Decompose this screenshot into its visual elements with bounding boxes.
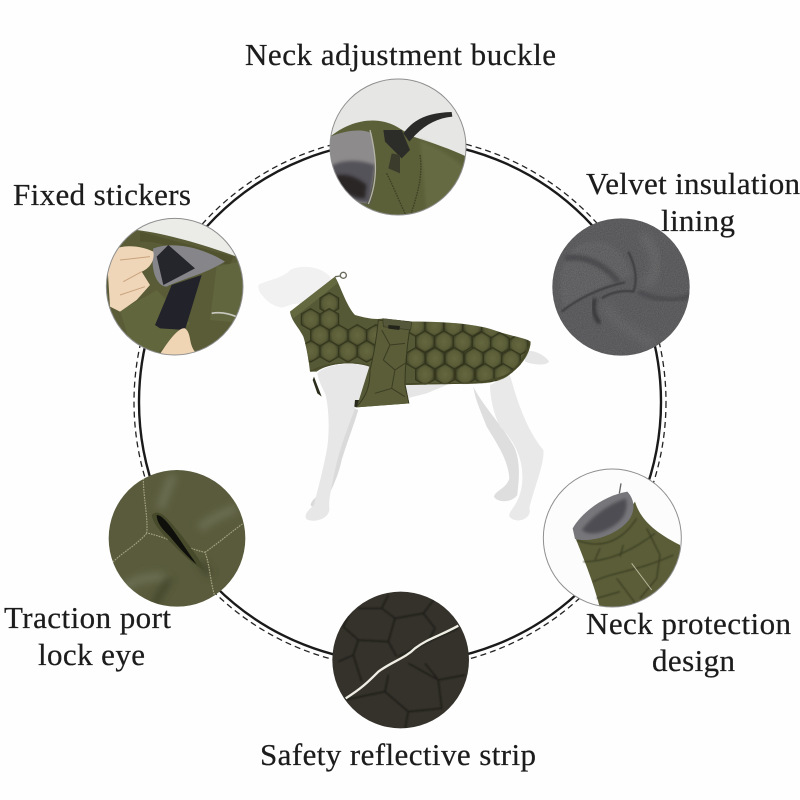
photo: safety reflective strip <box>332 592 469 728</box>
quilted coat <box>287 273 533 410</box>
heading: Neck protection design <box>586 606 792 678</box>
heading: Velvet insulation lining: lining <box>661 203 735 238</box>
dog in coat illustration <box>258 267 549 521</box>
coat strap <box>355 320 411 408</box>
heading: Neck adjustment buckle: Neck adjustment buckle <box>245 37 556 72</box>
heading: Fixed stickers: Fixed stickers <box>13 177 191 212</box>
heading: Velvet insulation lining: Velvet insulation <box>586 166 800 201</box>
dog mannequin <box>258 267 549 521</box>
photo: fixed stickers <box>103 217 250 360</box>
ring: solid and dashed circle <box>134 136 666 668</box>
photo: neck protection design <box>543 469 681 608</box>
photo: velvet insulation lining <box>552 218 692 357</box>
toggle on collar <box>335 272 346 278</box>
photo: traction port lock eye <box>109 470 245 608</box>
heading: Safety reflective strip: Safety reflective strip <box>260 737 536 772</box>
photo: neck adjustment buckle <box>327 77 470 220</box>
heading: Traction port lock eye <box>4 600 171 672</box>
heading: Neck protection design: Neck protection <box>586 606 792 641</box>
heading: Neck protection design: design <box>652 643 736 678</box>
heading: Traction port lock eye: lock eye <box>38 637 145 672</box>
reflective strip <box>346 626 458 698</box>
heading: Traction port lock eye: Traction port <box>4 600 171 635</box>
heading: Velvet insulation lining <box>586 166 800 238</box>
